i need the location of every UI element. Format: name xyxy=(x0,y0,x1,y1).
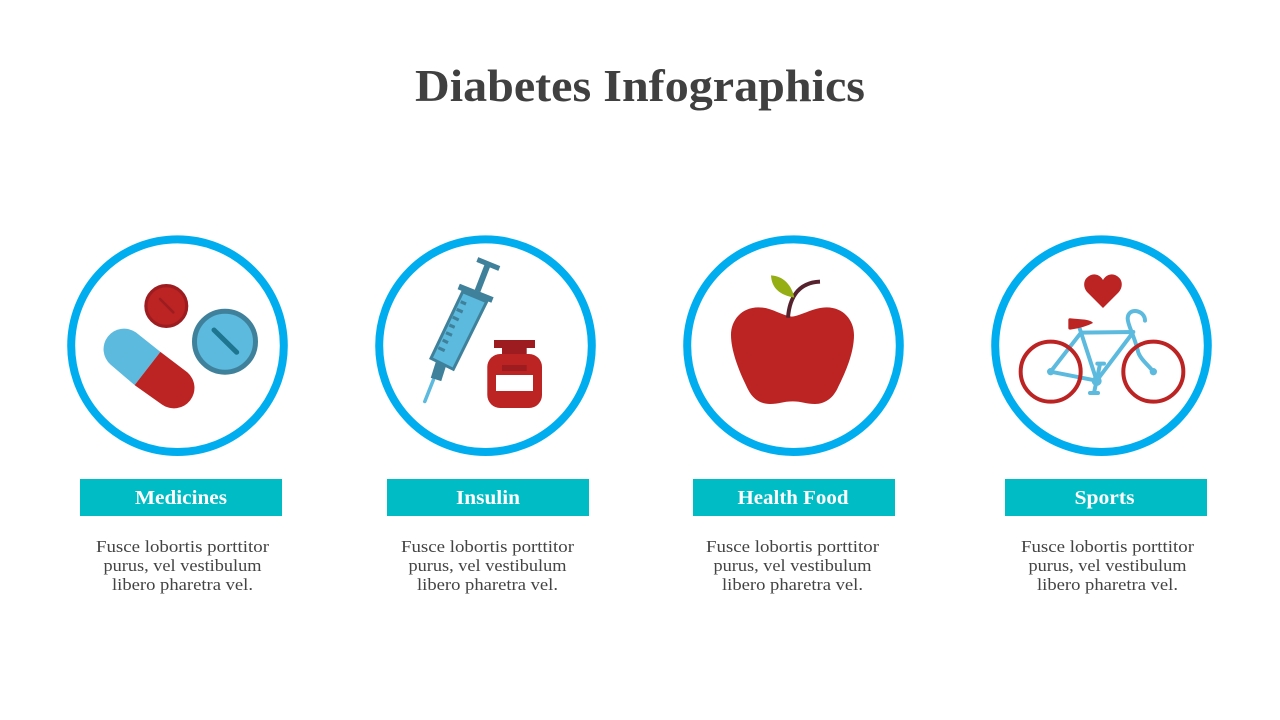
text: insulin description: purus, vel vestibulum xyxy=(408,556,567,575)
text: sports description xyxy=(1021,537,1195,594)
text: health food description: libero pharetra vel. xyxy=(722,575,863,594)
text: medicines description xyxy=(96,537,270,594)
heading: Insulin: Insulin xyxy=(456,487,520,509)
heading: Health Food: Health Food xyxy=(738,487,848,509)
icon ring: medicines xyxy=(71,239,284,452)
icon ring: health food xyxy=(687,239,900,452)
panel: insulin xyxy=(379,239,592,594)
icon: apple xyxy=(731,275,854,404)
panel: health food xyxy=(687,239,900,594)
text: medicines description: purus, vel vestibulum xyxy=(104,556,262,575)
heading: Health Food xyxy=(693,479,895,516)
text: health food description: Fusce lobortis porttitor xyxy=(706,537,880,556)
icon: insulin bottle xyxy=(487,340,542,408)
heading: Sports xyxy=(1005,479,1207,516)
text: sports description: libero pharetra vel. xyxy=(1037,575,1178,594)
text: insulin description: Fusce lobortis porttitor xyxy=(401,537,575,556)
heading: Sports: Sports xyxy=(1074,487,1135,509)
text: health food description xyxy=(706,537,880,594)
icon ring: sports xyxy=(995,239,1208,452)
text: health food description: purus, vel vestibulum xyxy=(714,556,872,575)
heading: Medicines: Medicines xyxy=(135,487,227,509)
text: medicines description: Fusce lobortis porttitor xyxy=(96,537,270,556)
icon: pills xyxy=(104,286,256,408)
heading: Insulin xyxy=(387,479,589,516)
icon: bicycle and heart xyxy=(1021,274,1183,402)
panel: sports xyxy=(995,239,1208,594)
heading: Medicines xyxy=(80,479,282,516)
icon: syringe xyxy=(425,260,499,402)
text: medicines description: libero pharetra vel. xyxy=(112,575,253,594)
text: insulin description xyxy=(401,537,575,594)
icon ring: insulin xyxy=(379,239,592,452)
title: Diabetes Infographics xyxy=(415,60,865,111)
text: sports description: purus, vel vestibulum xyxy=(1028,556,1187,575)
panel: medicines xyxy=(71,239,284,594)
text: sports description: Fusce lobortis porttitor xyxy=(1021,537,1195,556)
text: insulin description: libero pharetra vel. xyxy=(417,575,558,594)
